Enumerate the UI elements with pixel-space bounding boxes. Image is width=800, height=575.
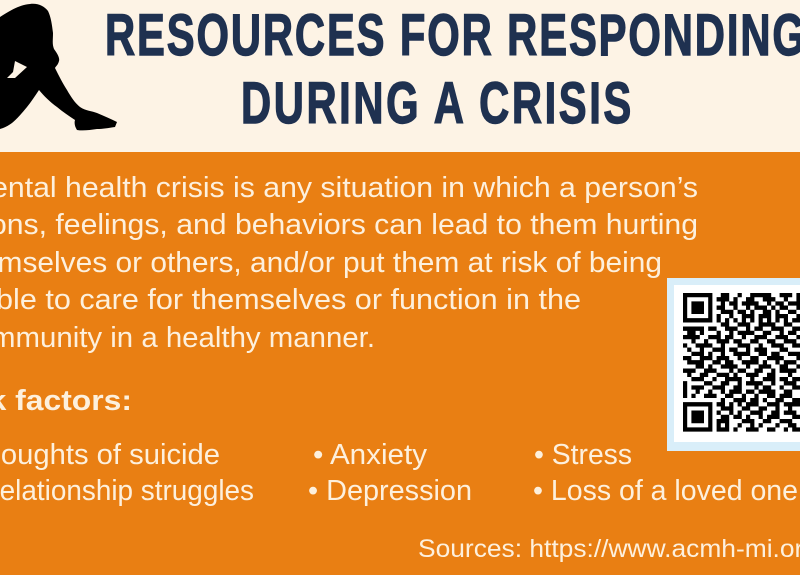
panel: orange information panel [0,152,800,575]
title [105,2,800,136]
list: risk factors [0,439,798,507]
text block: crisis definition [0,172,698,354]
title: DURING A CRISIS [241,70,631,136]
icon: seated person silhouette [0,4,117,130]
icon: QR code [683,295,800,430]
list: risk factors: • Depression [308,475,472,507]
title: RESOURCES FOR RESPONDING [105,2,800,68]
list: risk factors: • Anxiety [313,439,428,471]
source citation: Sources: https://www.acmh-mi.org [418,535,800,563]
list: risk factors: • Stress [534,439,632,471]
list: risk factors: • Loss of a loved one [533,475,798,507]
QR code card [667,278,800,451]
